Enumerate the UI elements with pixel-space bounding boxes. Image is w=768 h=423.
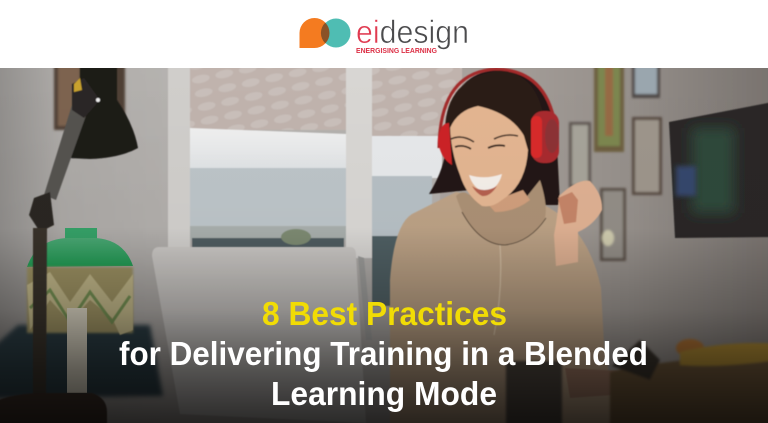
sweater seam xyxy=(494,245,501,335)
smile xyxy=(469,174,502,192)
green glass lamp xyxy=(27,228,133,393)
turtleneck collar xyxy=(456,180,546,245)
neck xyxy=(487,190,530,212)
woman xyxy=(390,68,614,423)
hand xyxy=(554,181,602,266)
eyebrows and eyes xyxy=(451,135,518,142)
logo tagline: ENERGISING LEARNING xyxy=(356,48,438,55)
title line 1: 8 Best Practices xyxy=(262,295,507,332)
headphone ear cup right xyxy=(531,111,559,163)
hair top xyxy=(444,80,539,136)
headphone ear cup left xyxy=(438,123,452,165)
logo wordmark: eidesign xyxy=(356,14,469,50)
laptop lid xyxy=(152,247,372,423)
sweater body xyxy=(390,192,620,423)
title xyxy=(119,295,648,412)
wall pictures xyxy=(54,60,662,261)
desk lamp, dark arm and head xyxy=(0,58,138,423)
title line 2: for Delivering Training in a Blended xyxy=(119,335,648,372)
dark patch below green lamp xyxy=(0,325,163,398)
forearm xyxy=(566,368,614,398)
wall TV xyxy=(669,101,768,238)
icon: orange and teal overlapping circles xyxy=(300,18,350,48)
headphones band xyxy=(439,69,556,148)
dark gradient overlay at bottom xyxy=(0,234,768,423)
face xyxy=(450,105,528,206)
mug and fruit basket xyxy=(506,339,768,423)
hair back xyxy=(429,70,560,205)
logo: eidesign xyxy=(300,14,469,55)
title line 3: Learning Mode xyxy=(271,375,497,412)
